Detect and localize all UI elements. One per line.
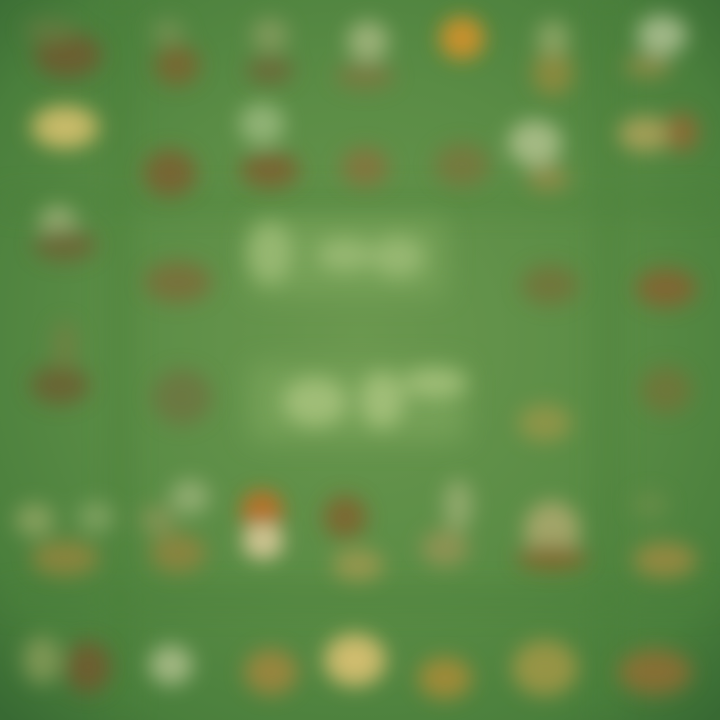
icon: row 6 column 1 <box>23 636 111 693</box>
icon: row 1 column 4 <box>335 21 395 90</box>
icon: row 2 column 5 <box>434 143 490 187</box>
icon: row 1 column 1 <box>24 19 102 78</box>
icon: row 3 column 1 <box>33 205 97 262</box>
icon: row 5 column 1 <box>15 501 115 576</box>
icon: row 4 column 2 <box>152 369 212 425</box>
center subheading: blurred title <box>283 369 467 428</box>
row 4 icons <box>30 321 692 442</box>
icon: row 6 column 2 <box>149 645 193 685</box>
icon: row 5 column 5 <box>421 479 473 567</box>
icon: row 5 column 7 <box>632 492 697 578</box>
icon: row 6 column 6 <box>512 640 578 696</box>
icon: row 1 column 6 <box>532 20 574 96</box>
icon: row 4 column 7 <box>640 366 692 414</box>
icon: row 2 column 7 <box>618 112 699 152</box>
row 2 icons <box>30 103 699 197</box>
icon: row 1 column 3 <box>246 18 294 85</box>
icon: row 5 column 6 <box>516 501 588 571</box>
icon: row 3 column 7 <box>635 268 697 308</box>
icon: row 1 column 5 <box>439 16 485 60</box>
center heading: blurred title <box>248 223 424 283</box>
icon: row 5 column 2 <box>140 479 210 573</box>
icon: row 2 column 4 <box>341 147 389 187</box>
icon: row 6 column 5 <box>418 657 472 699</box>
icon: row 4 column 6 <box>518 404 572 442</box>
row 5 icons <box>15 479 697 581</box>
icon: row 1 column 2 <box>151 19 200 86</box>
icon: row 2 column 1 <box>30 105 100 149</box>
icon: row 1 column 7 <box>624 15 687 78</box>
icon: row 3 column 2 <box>144 261 212 303</box>
row 1 icons <box>24 15 687 96</box>
icon: row 2 column 2 <box>143 149 197 197</box>
icon: row 2 column 6 <box>508 120 570 192</box>
icon: row 6 column 3 <box>244 649 298 695</box>
icon: row 4 column 1 <box>30 321 90 405</box>
center panel glow <box>250 220 465 440</box>
icon: row 5 column 3 <box>240 490 284 560</box>
bright highlights <box>41 23 478 678</box>
icon: row 6 column 7 <box>618 649 692 695</box>
icon: row 2 column 3 <box>239 103 300 189</box>
icon: row 5 column 4 <box>323 495 384 581</box>
icon: row 3 column 6 <box>521 265 579 305</box>
icon: row 6 column 4 <box>323 633 387 687</box>
row 6 icons <box>23 633 692 699</box>
row 3 icons <box>33 205 697 308</box>
